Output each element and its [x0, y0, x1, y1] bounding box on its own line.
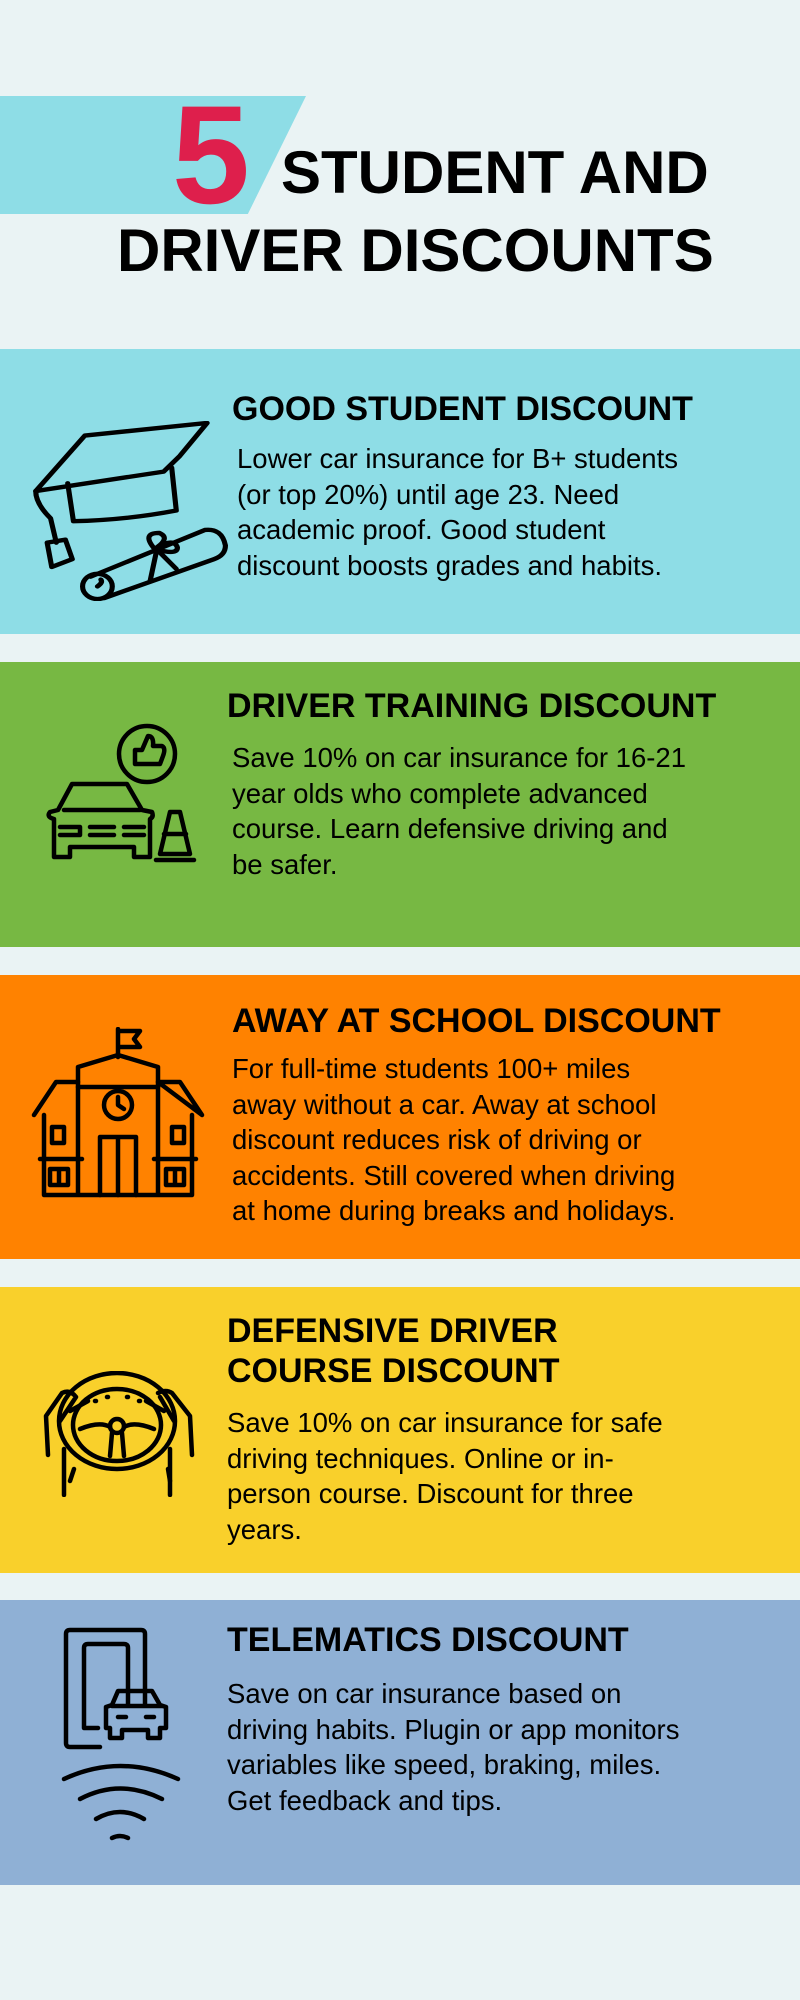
text block: (or top 20%) until age 23. Need [237, 478, 619, 510]
panel: defensive driver [0, 1287, 800, 1573]
text block: Get feedback and tips. [227, 1784, 502, 1816]
text block: driving techniques. Online or in- [227, 1442, 614, 1474]
heading: DEFENSIVE DRIVER [227, 1312, 558, 1350]
text block: For full-time students 100+ miles [232, 1053, 630, 1084]
text block [232, 742, 686, 880]
heading [227, 1312, 560, 1390]
text block [227, 1407, 663, 1545]
big number 5: 5 [172, 76, 250, 233]
title line 2: DRIVER DISCOUNTS [117, 217, 714, 284]
text block: Save 10% on car insurance for safe [227, 1407, 663, 1438]
text block: discount boosts grades and habits. [237, 550, 662, 580]
heading: GOOD STUDENT DISCOUNT [232, 390, 693, 428]
title banner [0, 76, 714, 284]
text block [227, 1678, 679, 1816]
icon: school building [32, 1027, 204, 1198]
text block: Save on car insurance based on [227, 1678, 621, 1709]
text block: years. [227, 1514, 302, 1544]
icon: graduation cap and diploma [33, 421, 228, 601]
text block: year olds who complete advanced [232, 778, 648, 808]
banner shape [0, 96, 306, 214]
title line 1: STUDENT AND [281, 139, 709, 206]
icon: hands on steering wheel [44, 1371, 194, 1497]
heading: COURSE DISCOUNT [227, 1352, 559, 1390]
text block: be safer. [232, 848, 338, 880]
panel: good student [0, 349, 800, 634]
icon: car with thumbs up and cone [46, 724, 196, 862]
text block: variables like speed, braking, miles. [227, 1749, 661, 1780]
panel: telematics [0, 1600, 800, 1885]
text block: discount reduces risk of driving or [232, 1124, 642, 1155]
heading: AWAY AT SCHOOL DISCOUNT [232, 1002, 721, 1040]
text block: Save 10% on car insurance for 16-21 [232, 742, 686, 773]
text block: person course. Discount for three [227, 1478, 634, 1509]
text block: course. Learn defensive driving and [232, 813, 668, 844]
text block: accidents. Still covered when driving [232, 1160, 675, 1190]
text block: at home during breaks and holidays. [232, 1195, 675, 1226]
heading: TELEMATICS DISCOUNT [227, 1621, 629, 1659]
icon: phone, car and signal [62, 1628, 180, 1840]
text block [232, 1053, 675, 1226]
text block: away without a car. Away at school [232, 1088, 656, 1120]
text block: academic proof. Good student [237, 514, 605, 545]
text block: driving habits. Plugin or app monitors [227, 1714, 679, 1744]
text block: Lower car insurance for B+ students [237, 443, 678, 474]
heading: DRIVER TRAINING DISCOUNT [227, 687, 716, 725]
text block [237, 443, 678, 581]
panel: away at school [0, 975, 800, 1259]
panel: driver training [0, 662, 800, 947]
